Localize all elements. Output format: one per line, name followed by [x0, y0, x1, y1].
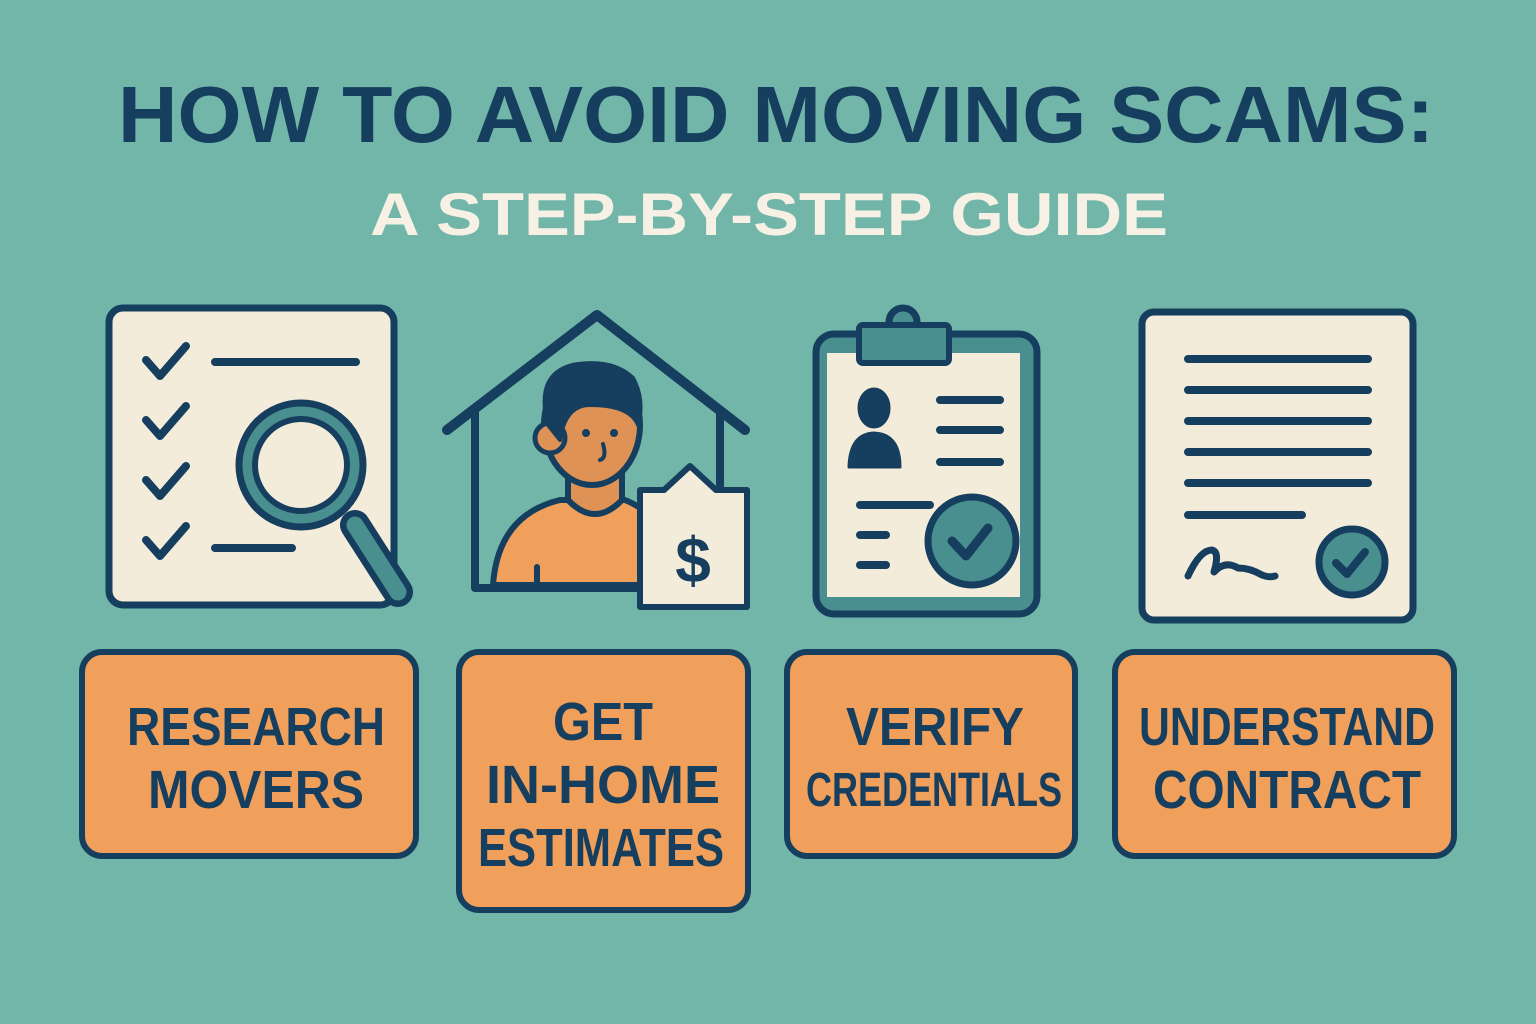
title: HOW TO AVOID MOVING SCAMS:	[118, 70, 1434, 159]
icon: house with person and price tag	[447, 315, 747, 607]
box: get in-home estimates: ESTIMATES	[478, 818, 724, 878]
icon: clipboard credentials	[816, 308, 1037, 614]
subtitle: A STEP-BY-STEP GUIDE	[370, 181, 1168, 248]
box: research movers	[82, 652, 416, 856]
box: get in-home estimates: IN-HOME	[486, 755, 720, 815]
box: research movers: RESEARCH	[127, 697, 385, 757]
box: understand contract: CONTRACT	[1153, 760, 1421, 820]
box: verify credentials: VERIFY	[846, 697, 1024, 757]
icon: checklist with magnifier	[109, 308, 398, 605]
icon: signed contract	[1142, 312, 1413, 620]
box: verify credentials: CREDENTIALS	[806, 764, 1062, 817]
box: understand contract	[1115, 652, 1454, 856]
icon: house with person and price tag: $	[675, 524, 711, 596]
box: get in-home estimates	[459, 652, 748, 910]
box: get in-home estimates: GET	[553, 692, 653, 752]
box: understand contract: UNDERSTAND	[1139, 697, 1435, 757]
box: verify credentials	[787, 652, 1075, 856]
box: research movers: MOVERS	[148, 760, 364, 820]
